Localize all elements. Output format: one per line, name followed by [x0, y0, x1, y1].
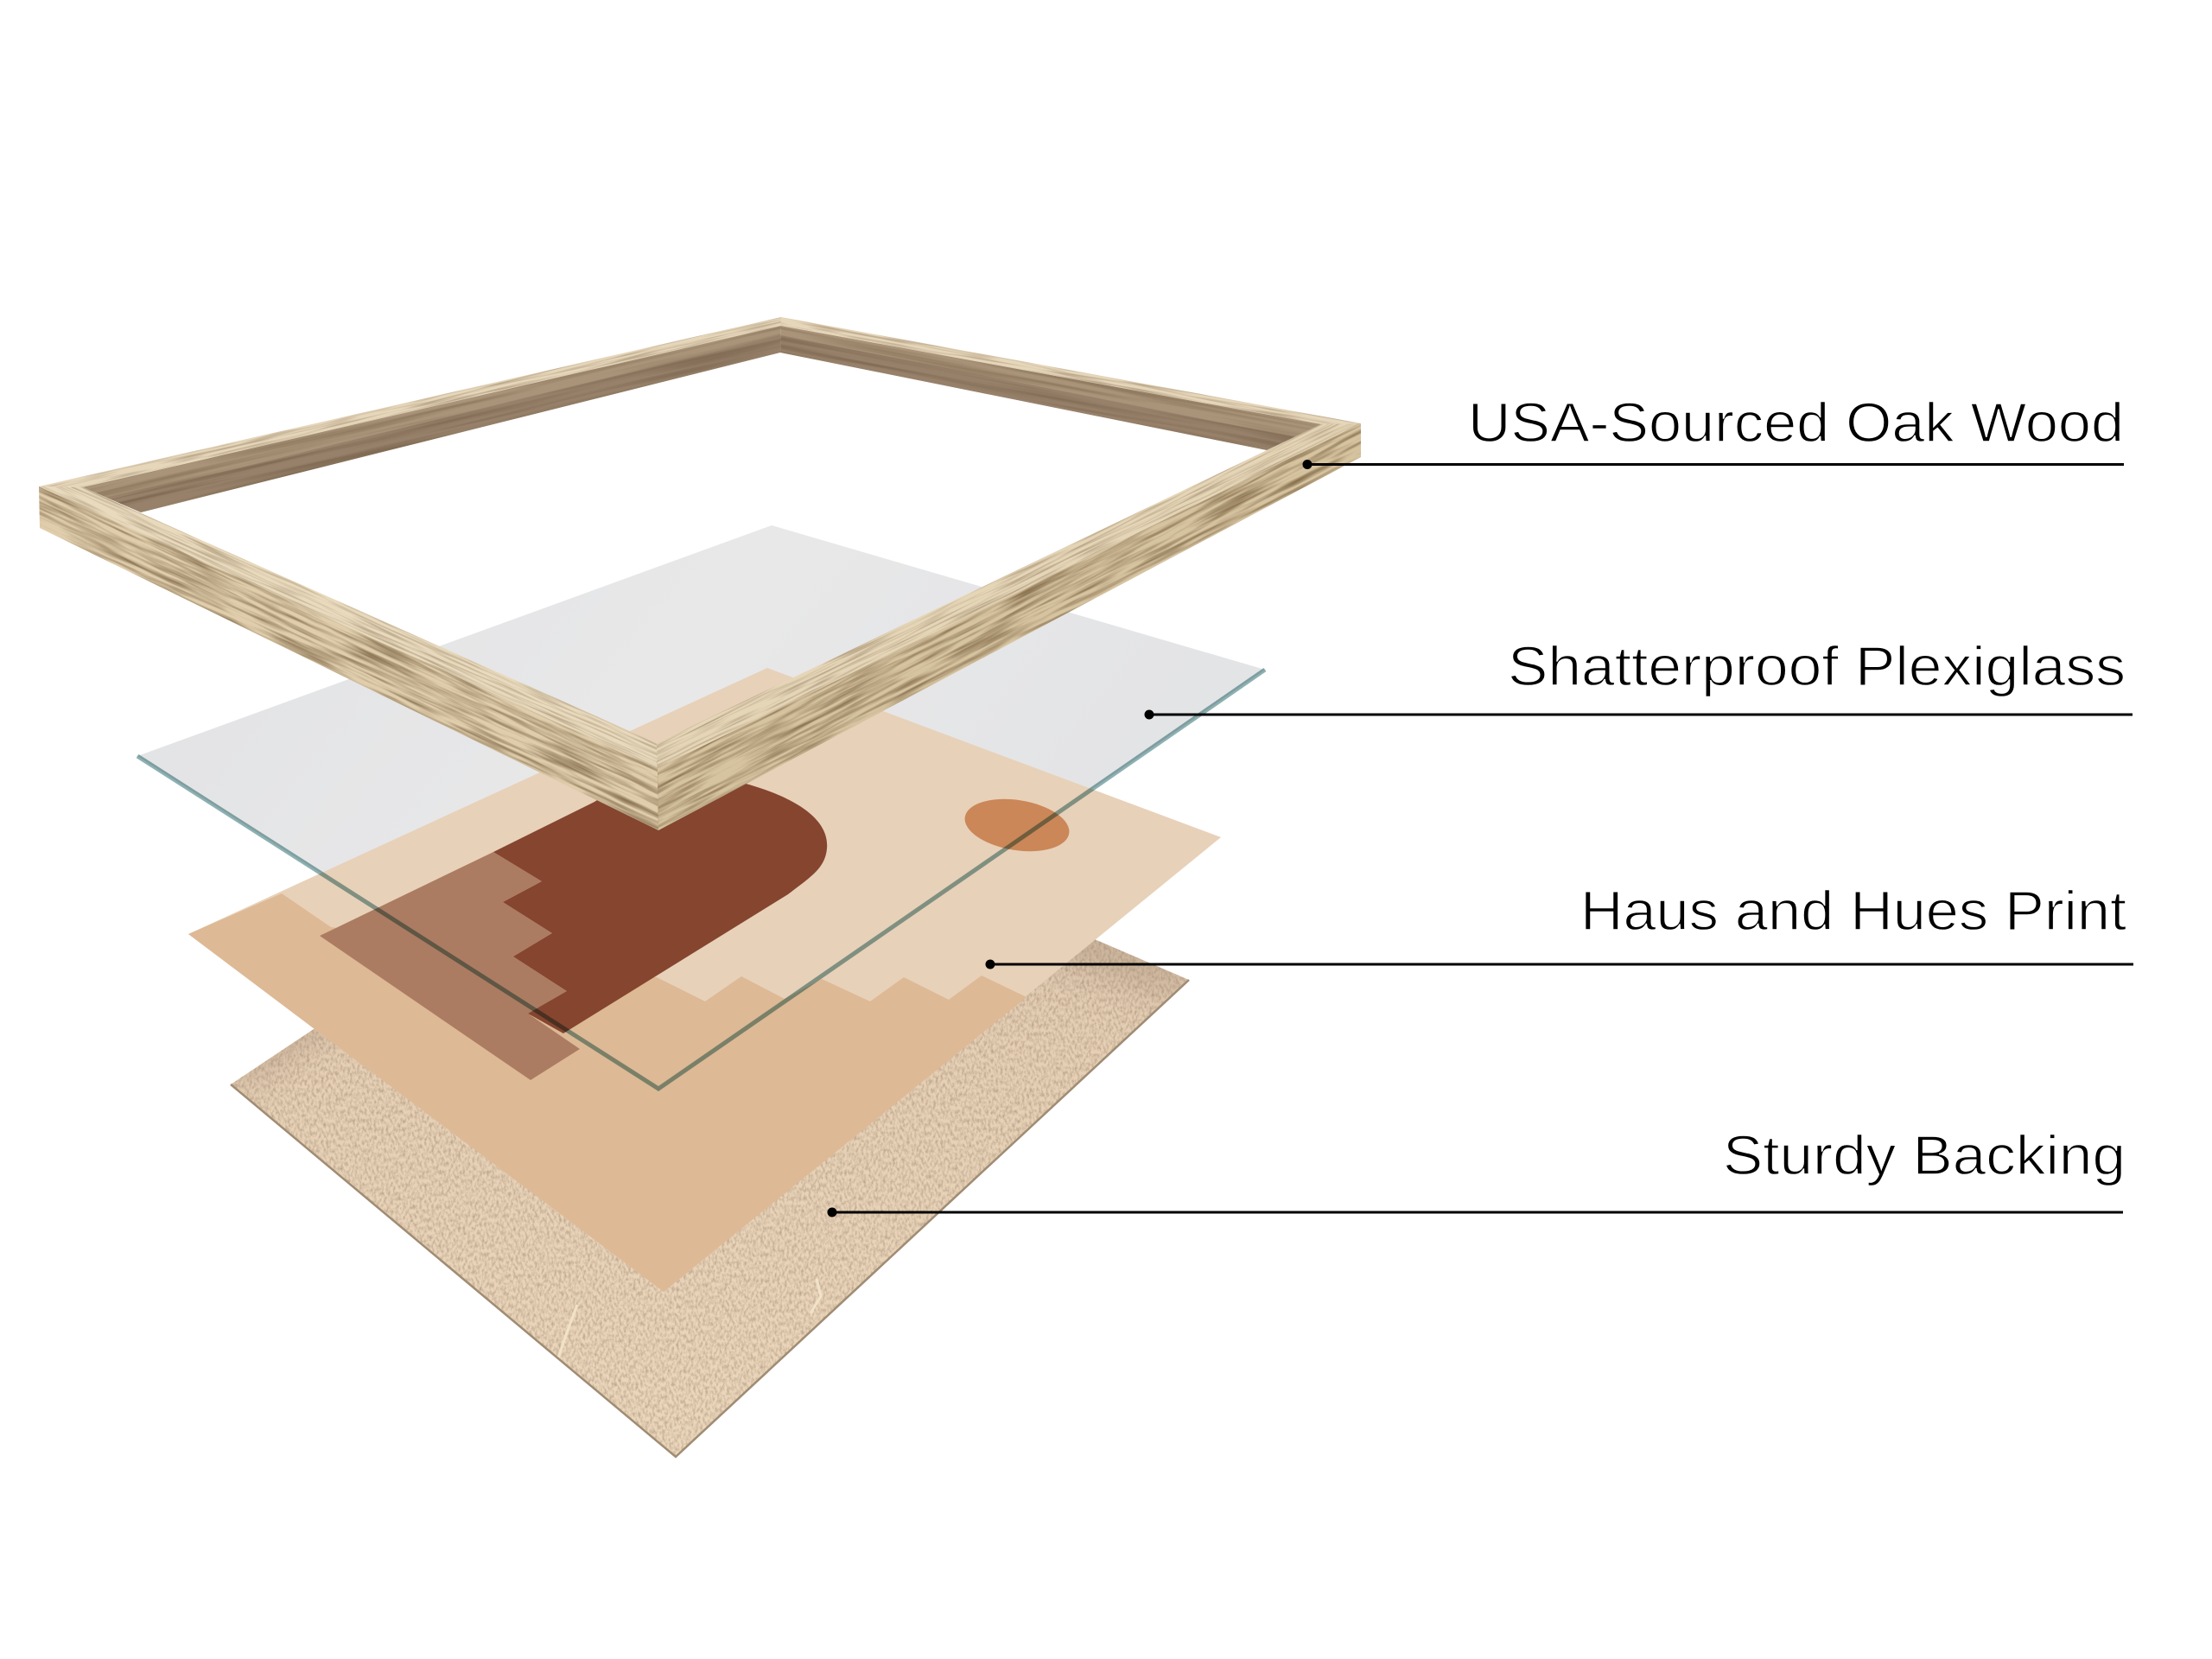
print: lower darker sand: [188, 893, 1027, 1292]
plexiglass front edges: [137, 670, 1265, 1089]
far right top face: [781, 317, 1360, 424]
leader line: print: [985, 959, 2133, 969]
print: light background: [188, 668, 1221, 1292]
near left outer face: [39, 486, 658, 830]
far left top face: [39, 317, 781, 487]
art print: [188, 668, 1221, 1292]
print: orange sun: [961, 792, 1073, 858]
print: light brown stepped shape: [320, 852, 580, 1080]
near left top face: [39, 486, 658, 768]
label: backing: Sturdy Backing: [1723, 1124, 2126, 1186]
far right inner wall: [780, 326, 1320, 450]
oak wood frame: [0, 251, 1451, 902]
label: plexiglass: Shatterproof Plexiglass: [1508, 635, 2126, 697]
leader line: plexiglass: [1144, 710, 2133, 719]
callout: Haus and Hues Print: [985, 880, 2133, 969]
sturdy backing board: [230, 940, 1190, 1459]
callout: USA-Sourced Oak Wood: [1303, 391, 2124, 469]
callout: Shatterproof Plexiglass: [1144, 635, 2133, 719]
print: dark brown arch: [493, 760, 827, 1033]
far left inner wall: [83, 326, 781, 512]
plexiglass sheet: [137, 525, 1265, 1089]
near right top face: [657, 423, 1361, 768]
near right outer face: [658, 423, 1361, 830]
label: print: Haus and Hues Print: [1580, 880, 2126, 942]
callout: Sturdy Backing: [828, 1124, 2126, 1217]
label: oak wood: USA-Sourced Oak Wood: [1468, 391, 2124, 454]
leader line: backing: [828, 1208, 2123, 1217]
leader line: oak wood: [1303, 460, 2124, 469]
